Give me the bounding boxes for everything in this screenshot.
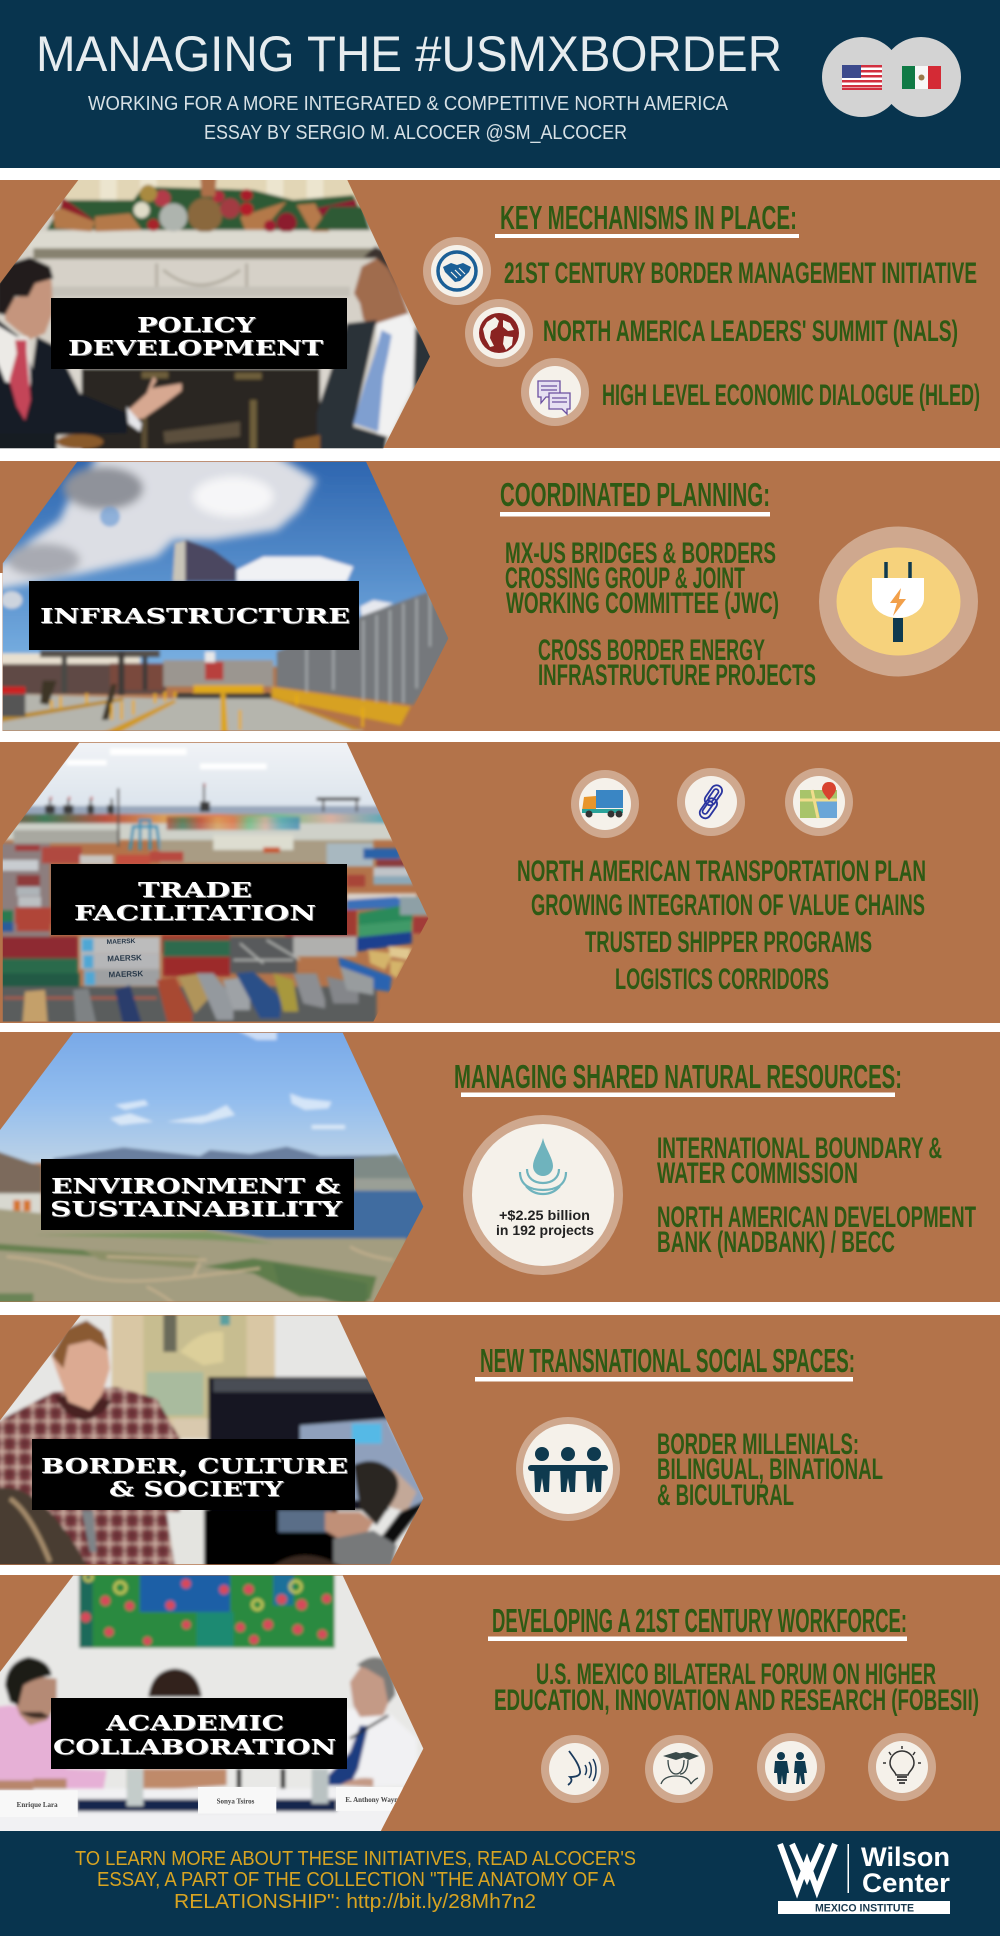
callout: water funding (463, 1115, 623, 1275)
label: border culture society: BORDER, CULTURE (41, 1454, 348, 1478)
label: environment: SUSTAINABILITY (50, 1197, 343, 1221)
logo: wilson center: MEXICO INSTITUTE (815, 1902, 914, 1914)
text: nadbank (657, 1201, 976, 1259)
text: bridges and borders (505, 537, 779, 620)
photo: speaker in room (0, 1315, 424, 1564)
text: boundary and water commission: WATER COMMISSION (657, 1157, 858, 1190)
label: border culture society: & SOCIETY (109, 1477, 283, 1501)
heading: coordinated planning: COORDINATED PLANNING: (500, 476, 770, 513)
logo: wilson center: Wilson (861, 1842, 950, 1872)
label: policy development (51, 298, 347, 369)
label: border culture society (32, 1439, 355, 1510)
heading: key mechanisms: KEY MECHANISMS IN PLACE: (500, 199, 797, 236)
panel: environment and sustainability (0, 1020, 1000, 1317)
icon: chain link (677, 768, 745, 836)
text: learn more (75, 1848, 636, 1913)
label: policy development: POLICY (137, 313, 255, 337)
text: bridges and borders: WORKING COMMITTEE (JWC) (506, 587, 779, 620)
text: border millenials: & BICULTURAL (657, 1479, 794, 1512)
white left edge (0, 573, 2, 731)
label: trade facilitation: TRADE (138, 878, 252, 902)
subtitle: WORKING FOR A MORE INTEGRATED & COMPETITIVE NORTH AMERICA (88, 93, 729, 115)
name cards: Sonya Tsiros (217, 1798, 255, 1806)
text: boundary and water commission (657, 1132, 942, 1190)
photo: leaders at fireplace (0, 180, 430, 448)
label: trade facilitation (51, 864, 347, 935)
text: funding figure: in 192 projects (496, 1223, 594, 1238)
text: border millenials (657, 1428, 883, 1512)
container brand text: MAERSK (108, 969, 144, 979)
heading: key mechanisms (495, 199, 799, 238)
label: policy development: DEVELOPMENT (68, 336, 324, 360)
label: academic collaboration: ACADEMIC (105, 1711, 284, 1735)
text: border millenials: BORDER MILLENIALS: (657, 1428, 859, 1461)
label: environment: ENVIRONMENT & (51, 1174, 341, 1198)
text: fobesii (494, 1658, 979, 1717)
text: energy projects (538, 634, 816, 692)
icon: water drop (520, 1138, 566, 1194)
icon: electric plug (819, 526, 978, 676)
heading: social spaces (475, 1342, 855, 1382)
text: learn more: TO LEARN MORE ABOUT THESE INITIATIVES, READ ALCOCER'S (75, 1848, 636, 1870)
title: MANAGING THE #USMXBORDER (36, 26, 782, 82)
panel: trade facilitation (0, 730, 1000, 1033)
icon: flags (822, 37, 961, 117)
text: energy projects: INFRASTRUCTURE PROJECTS (538, 659, 816, 692)
container brand text: MAERSK (106, 938, 136, 946)
text: funding figure (496, 1208, 594, 1238)
panel: academic collaboration (0, 1562, 1000, 1845)
panel: policy development (0, 170, 1000, 463)
icon: truck (571, 770, 639, 838)
photo: reservoir landscape (0, 1032, 424, 1302)
label: infrastructure: INFRASTRUCTURE (40, 604, 350, 628)
heading: coordinated planning (500, 476, 770, 516)
logo: wilson center (778, 1842, 950, 1914)
icon: three people (516, 1417, 620, 1521)
icon: chat bubbles (521, 358, 589, 426)
label: environment (41, 1159, 354, 1230)
label: trade facilitation: FACILITATION (74, 901, 316, 925)
logo: wilson center: Center (862, 1868, 950, 1898)
author line: ESSAY BY SERGIO M. ALCOCER @SM_ALCOCER (204, 122, 627, 144)
panel: infrastructure (0, 450, 1000, 743)
icon: light bulb (868, 1733, 936, 1801)
icon: globe (465, 299, 533, 367)
panel: border culture and society (0, 1315, 1000, 1565)
icon: map pin (785, 768, 853, 836)
text: learn more: ESSAY, A PART OF THE COLLECTION "THE ANATOMY OF A (97, 1869, 616, 1891)
photo: panel discussion (0, 1575, 424, 1831)
name cards (0, 1787, 403, 1817)
photo: container port (2, 742, 428, 1022)
name cards: Enrique Lara (17, 1801, 58, 1809)
name cards: E. Anthony Wayne (345, 1796, 401, 1804)
container brand text (106, 938, 144, 979)
icon: couple (757, 1733, 825, 1801)
text: trade list: LOGISTICS CORRIDORS (615, 963, 829, 996)
text: bridges and borders: MX-US BRIDGES & BORDERS (505, 537, 776, 570)
text: learn more: RELATIONSHIP": http://bit.ly/28Mh7n2 (174, 1891, 536, 1913)
label: infrastructure (29, 581, 359, 650)
text: bridges and borders: CROSSING GROUP & JOINT (505, 562, 745, 595)
header banner (0, 0, 1000, 168)
text: energy projects: CROSS BORDER ENERGY (538, 634, 765, 667)
icon: nose and speech (541, 1735, 609, 1803)
icon: handshake (423, 237, 491, 305)
icon: graduates (645, 1735, 713, 1803)
photo: border crossing (2, 462, 448, 730)
container brand text: MAERSK (107, 953, 142, 963)
text: funding figure: +$2.25 billion (499, 1208, 590, 1223)
label: academic collaboration (51, 1698, 347, 1769)
footer banner (0, 1831, 1000, 1936)
text: trade list (517, 855, 926, 996)
label: academic collaboration: COLLABORATION (53, 1735, 336, 1759)
